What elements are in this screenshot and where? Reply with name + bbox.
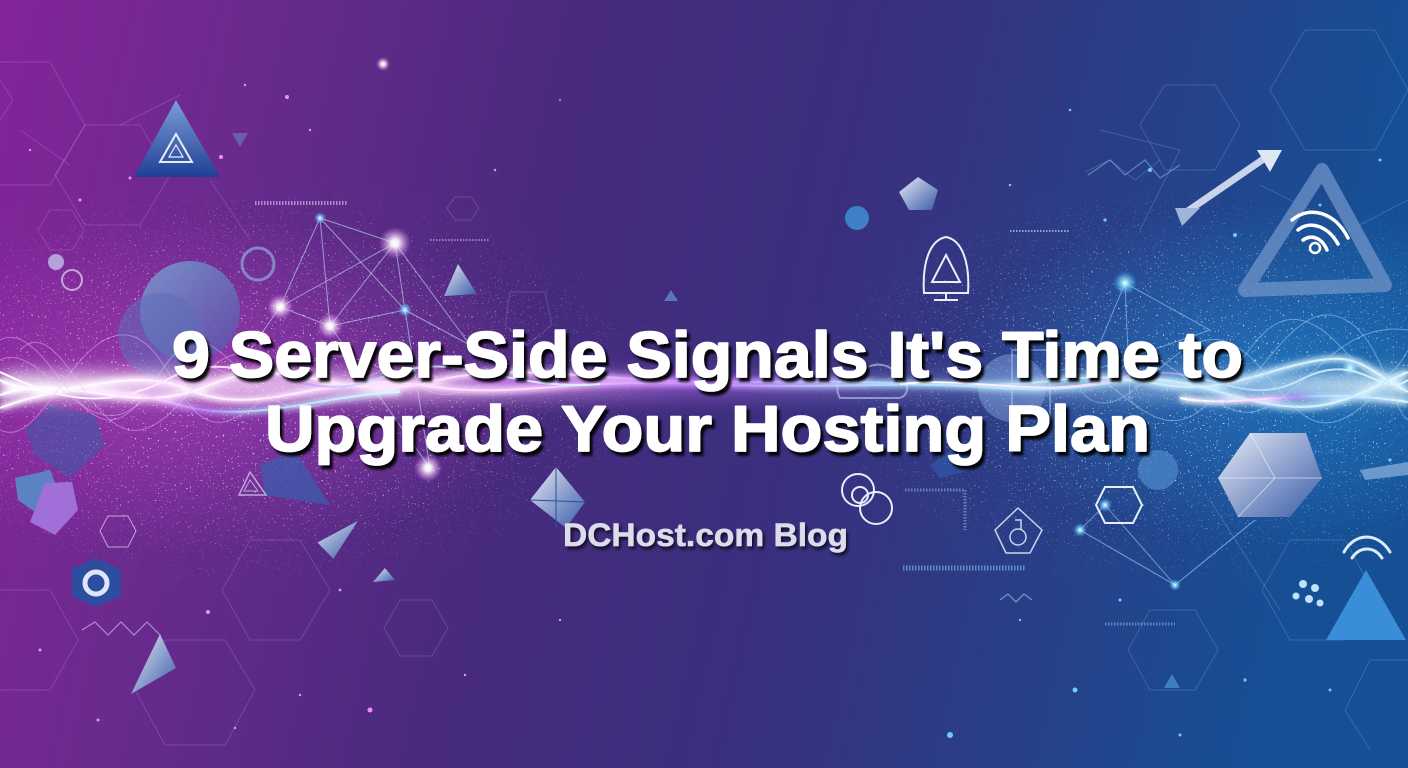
centre cloud and server shapes	[837, 350, 1050, 478]
large triangle with wifi	[1245, 170, 1385, 290]
network diagram right	[1073, 271, 1359, 591]
large hex gem right	[1218, 433, 1322, 517]
scattered dots	[29, 84, 561, 729]
title: 9 Server-Side Signals It's Time to	[172, 318, 1243, 391]
icon: flask hexagon	[995, 508, 1042, 553]
icon: triangle in dome	[924, 237, 968, 300]
particle field	[0, 182, 1408, 588]
icon: triangle top left	[134, 100, 220, 177]
large spheres left	[118, 248, 274, 377]
zigzag lines	[82, 160, 1180, 635]
icon: wifi triangle bottom right	[1164, 537, 1406, 688]
arrow top right	[1175, 150, 1282, 226]
icon: overlapping circles	[842, 474, 892, 524]
icon: hexagon outline and pin	[62, 270, 266, 547]
cluster gems left	[15, 405, 330, 535]
subtitle: DCHost.com Blog	[563, 517, 848, 553]
dotted rulers	[255, 203, 1175, 624]
icon: hexagon right	[1096, 487, 1142, 523]
hexagon line pattern left	[0, 62, 552, 745]
gem centre left	[530, 467, 585, 528]
title: Upgrade Your Hosting Plan	[265, 392, 1150, 465]
hexagon line pattern right	[1080, 30, 1408, 750]
gem top right	[845, 177, 938, 230]
energy wave band	[0, 315, 1408, 432]
icon: ring badge	[72, 558, 121, 607]
network diagram left	[250, 57, 470, 482]
title	[172, 318, 1243, 465]
sphere right	[1138, 450, 1408, 490]
side glows	[0, 205, 1408, 555]
icon: small triangles left	[131, 133, 678, 694]
